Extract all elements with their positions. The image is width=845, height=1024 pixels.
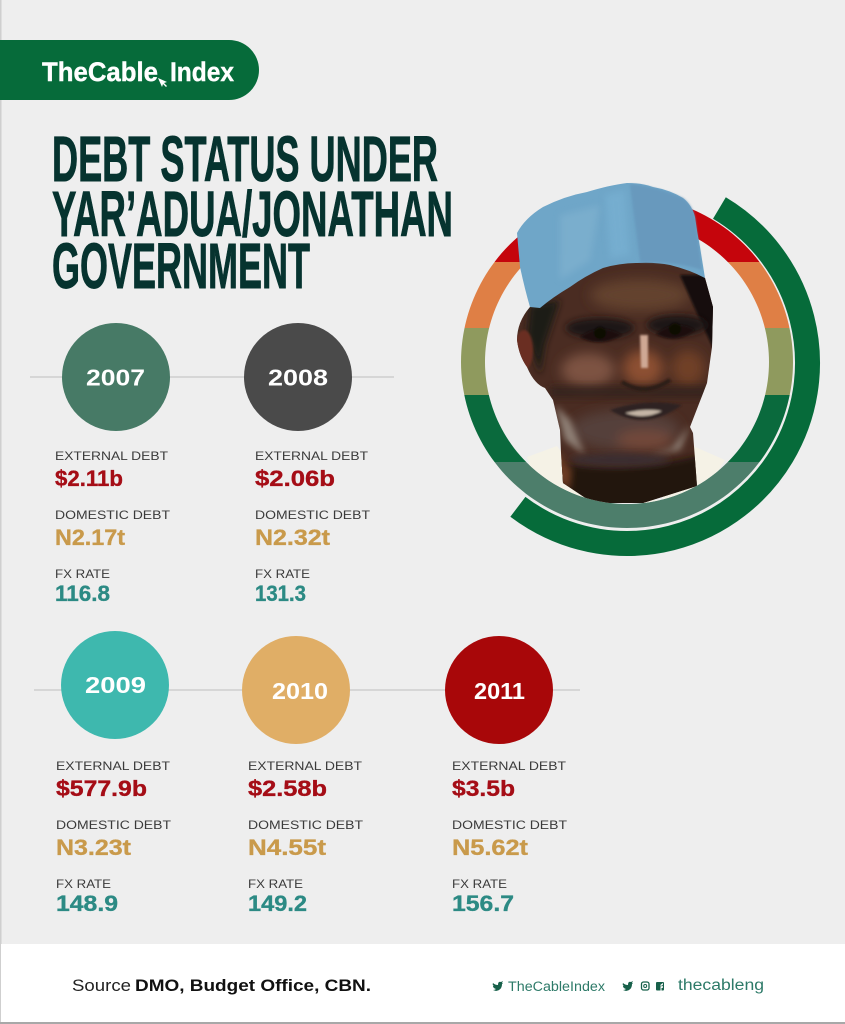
header logo pill: Index <box>170 57 234 87</box>
year block 2008: DOMESTIC DEBT <box>255 510 370 522</box>
chin <box>617 430 673 450</box>
year block 2007: N2.17t <box>55 525 126 550</box>
year block 2009: N3.23t <box>56 835 132 860</box>
year block 2007: DOMESTIC DEBT <box>55 510 170 522</box>
right cheek <box>671 350 705 386</box>
year block 2010: 149.2 <box>248 891 307 916</box>
year block 2011: N5.62t <box>452 835 529 860</box>
year block 2009: 2009 <box>85 672 146 698</box>
ring graphic with portrait <box>461 182 820 556</box>
year block 2011: EXTERNAL DEBT <box>452 761 566 773</box>
year block 2009: EXTERNAL DEBT <box>56 761 170 773</box>
timeline line row 2 <box>34 689 580 691</box>
source text: Source <box>72 976 131 995</box>
eyes <box>580 323 695 342</box>
year block 2008: 2008 <box>268 364 328 390</box>
title: YAR’ADUA/JONATHAN <box>52 178 453 250</box>
striped ring <box>461 209 793 528</box>
cap <box>517 183 705 308</box>
year block 2010: 2010 <box>272 678 328 704</box>
nose highlight and nostrils <box>622 335 670 389</box>
timeline line row 1 <box>30 376 394 378</box>
year block 2010: $2.58b <box>248 776 327 801</box>
header logo pill <box>0 40 259 100</box>
source text: DMO, Budget Office, CBN. <box>135 976 371 995</box>
year block 2011: $3.5b <box>452 776 515 801</box>
year block 2007: $2.11b <box>55 466 123 491</box>
year block 2008: N2.32t <box>255 525 331 550</box>
year block 2011 <box>445 636 567 916</box>
title: DEBT STATUS UNDER <box>52 123 438 195</box>
robe <box>530 465 718 503</box>
portrait <box>510 183 725 510</box>
header logo pill: TheCable <box>42 57 158 87</box>
year block 2009: 148.9 <box>56 891 118 916</box>
year block 2007: FX RATE <box>55 569 110 581</box>
forehead tone <box>590 279 690 311</box>
year block 2007: 2007 <box>86 364 145 390</box>
year block 2008: $2.06b <box>255 466 335 491</box>
year block 2010: N4.55t <box>248 835 327 860</box>
year block 2010: DOMESTIC DEBT <box>248 820 363 832</box>
mouth <box>610 402 682 420</box>
year block 2010 <box>242 636 363 916</box>
under-nose band <box>550 386 710 398</box>
right jaw highlight <box>657 427 690 456</box>
year block 2010: FX RATE <box>248 879 303 891</box>
lower face <box>570 410 680 450</box>
brows and eye sockets <box>566 315 707 338</box>
social icons <box>623 981 664 991</box>
year block 2007: 116.8 <box>55 581 110 606</box>
title <box>52 123 453 302</box>
year block 2011: 156.7 <box>452 891 514 916</box>
year block 2011: FX RATE <box>452 879 507 891</box>
year block 2009: FX RATE <box>56 879 111 891</box>
left cheek <box>561 353 615 387</box>
title: GOVERNMENT <box>52 230 310 302</box>
social handle right: thecableng <box>678 977 764 994</box>
social handle left: TheCableIndex <box>508 979 605 994</box>
neck <box>562 452 697 503</box>
head and neck <box>517 262 713 503</box>
year block 2008: EXTERNAL DEBT <box>255 451 368 463</box>
cap pattern <box>630 184 702 270</box>
year block 2008: FX RATE <box>255 569 310 581</box>
footer <box>0 944 845 1024</box>
year block 2011: 2011 <box>474 678 525 704</box>
nose <box>623 350 663 386</box>
left jaw highlight <box>555 405 585 455</box>
year block 2008: 131.3 <box>255 581 306 606</box>
year block 2010: EXTERNAL DEBT <box>248 761 362 773</box>
year block 2009: $577.9b <box>56 776 147 801</box>
year block 2008 <box>244 323 370 606</box>
year block 2009 <box>56 631 171 916</box>
outer green arc <box>380 116 845 610</box>
year block 2009: DOMESTIC DEBT <box>56 820 171 832</box>
hair and ear <box>527 300 560 375</box>
year block 2007 <box>55 323 170 606</box>
year block 2011: DOMESTIC DEBT <box>452 820 567 832</box>
year block 2007: EXTERNAL DEBT <box>55 451 168 463</box>
